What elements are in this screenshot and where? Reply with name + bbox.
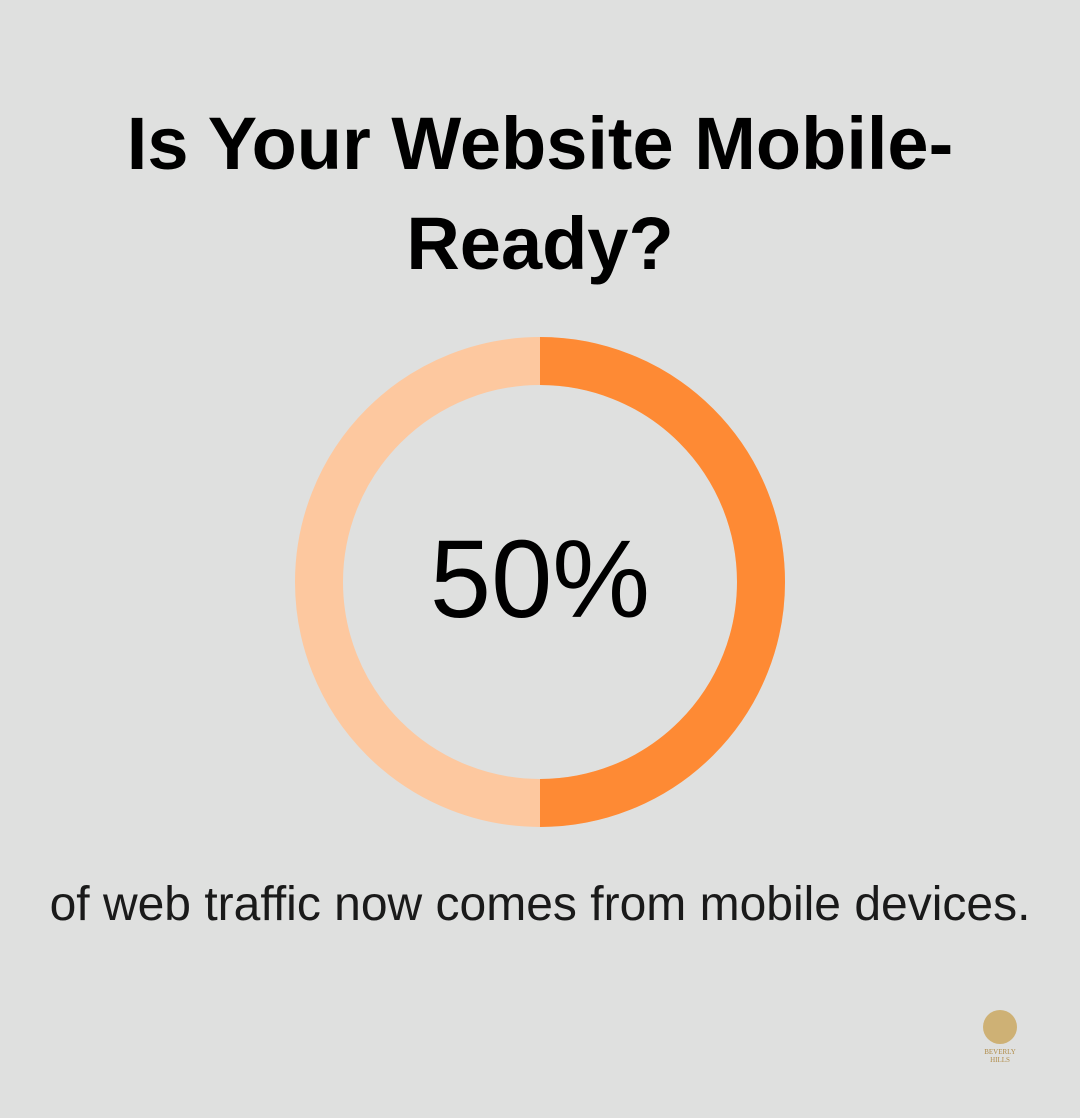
title: Ready? bbox=[406, 202, 674, 285]
subtitle text: of web traffic now comes from mobile devices. bbox=[50, 878, 1030, 931]
logo: BEVERLY HILLS bbox=[984, 1048, 1016, 1064]
logo bbox=[983, 1010, 1017, 1064]
title: Is Your Website Mobile- bbox=[127, 102, 953, 185]
donut chart: 50% bbox=[430, 518, 650, 641]
title bbox=[127, 102, 953, 285]
